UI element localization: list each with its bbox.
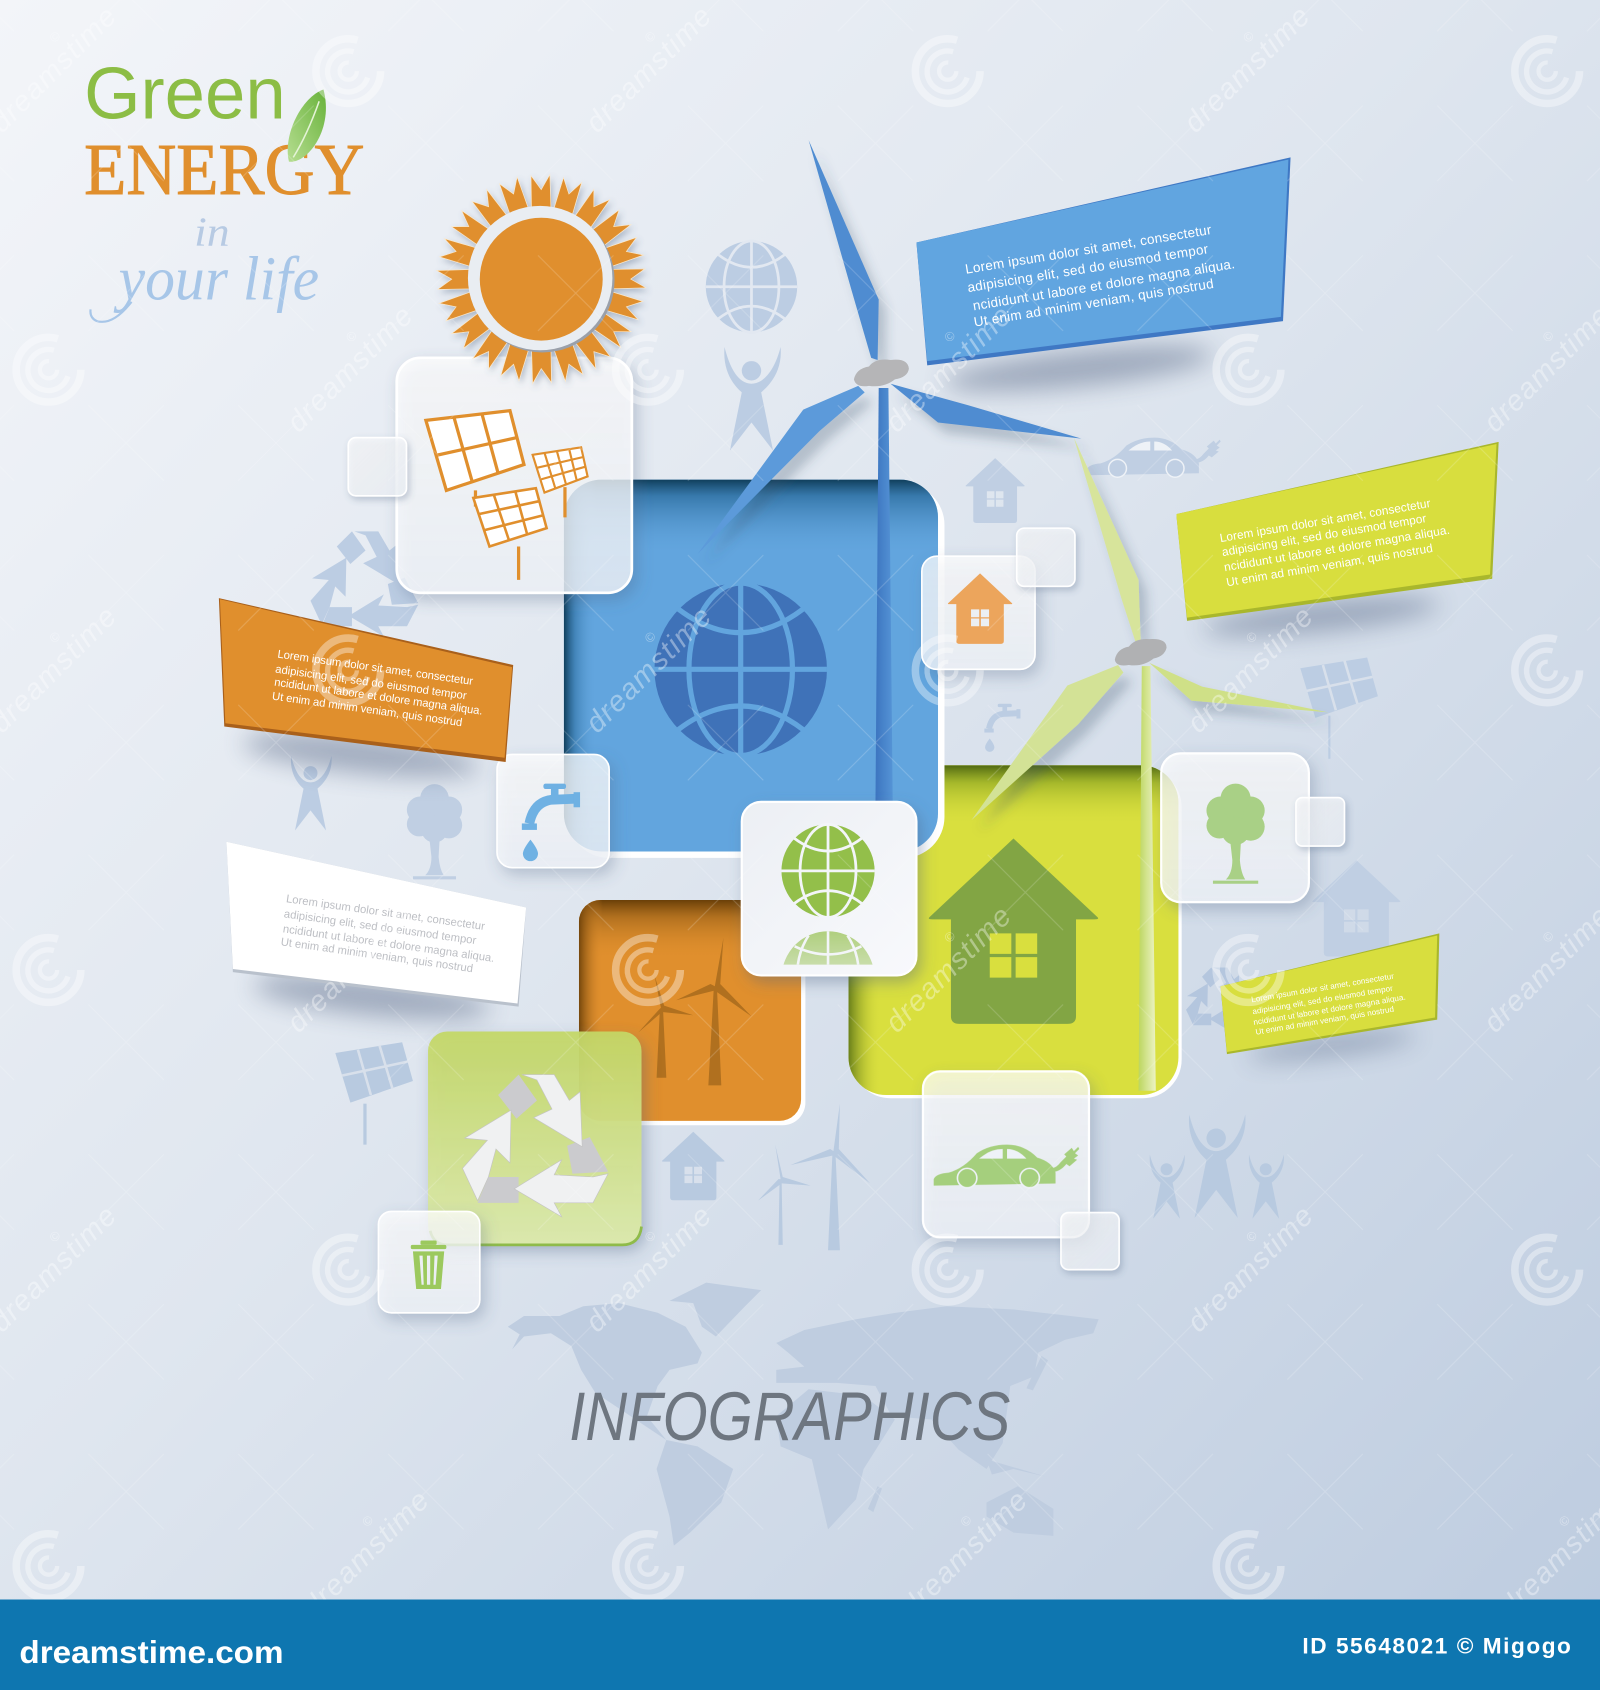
banner: blue bbox=[916, 157, 1291, 365]
background icon: car bbox=[1087, 438, 1221, 477]
background icon: solar panel lower bbox=[335, 1042, 413, 1145]
icon: turbines on orange bbox=[638, 938, 751, 1085]
banner: green large: adipisicing elit, sed do eiusmod tempor bbox=[1221, 511, 1427, 559]
background icon: person bbox=[724, 347, 781, 451]
card: recycle bbox=[428, 1031, 642, 1245]
card: car bbox=[923, 1071, 1089, 1237]
banner: green large bbox=[1176, 442, 1499, 621]
icon: electric car bbox=[934, 1145, 1079, 1188]
card: small square house bbox=[1017, 528, 1075, 586]
background icons: three people bbox=[1150, 1114, 1284, 1219]
banner: green small: ncididunt ut labore et dolore magna aliqua. bbox=[1253, 993, 1406, 1027]
title: Green bbox=[84, 53, 286, 135]
banner: green small: Ut enim ad minim veniam, quis nostrud bbox=[1255, 1005, 1395, 1037]
banner: blue: adipisicing elit, sed do eiusmod tempor bbox=[966, 241, 1210, 295]
background icon: tap bbox=[984, 704, 1020, 752]
wind turbine: blue bbox=[698, 140, 1081, 803]
banner: green small bbox=[1220, 933, 1439, 1054]
wind turbine: green bbox=[971, 438, 1328, 1091]
icon: big globe bbox=[654, 583, 827, 756]
card: small square solar bbox=[348, 438, 406, 496]
icon: recycle arrows bbox=[463, 1075, 608, 1217]
panel: orange cutout bbox=[579, 900, 805, 1125]
banner: orange: Ut enim ad minim veniam, quis nostrud bbox=[271, 691, 463, 729]
banner: green large: Lorem ipsum dolor sit amet, consectetur bbox=[1219, 496, 1432, 545]
heading: infographics: INFOGRAPHICS bbox=[569, 1378, 1010, 1455]
background icon: person left bbox=[291, 756, 332, 831]
icon: tree bbox=[1206, 784, 1265, 884]
banner: green small: Lorem ipsum dolor sit amet, consectetur bbox=[1251, 972, 1395, 1004]
background icon: house top bbox=[965, 458, 1025, 523]
icon: leaf bbox=[288, 89, 326, 162]
background icon: house right bbox=[1312, 860, 1400, 956]
card: trash bbox=[378, 1211, 480, 1313]
icon: trash can bbox=[411, 1241, 446, 1289]
card: house bbox=[922, 556, 1035, 669]
background icon: recycle bbox=[310, 531, 418, 637]
card: small square car bbox=[1061, 1213, 1119, 1270]
footer logo text: dreamstime.com bbox=[19, 1635, 284, 1670]
banner: green large: Ut enim ad minim veniam, quis nostrud bbox=[1225, 541, 1434, 589]
icon: orange house bbox=[948, 573, 1012, 644]
banner: green small: adipisicing elit, sed do eiusmod tempor bbox=[1252, 984, 1394, 1016]
icon: green globe bbox=[781, 824, 875, 917]
background icon: tree left bbox=[407, 784, 462, 879]
icon: solar panels bbox=[426, 411, 588, 580]
banner: blue: ncididunt ut labore et dolore magna aliqua. bbox=[972, 256, 1236, 313]
icon: tap bbox=[522, 784, 580, 861]
card: tree bbox=[1161, 753, 1309, 902]
title: in bbox=[194, 209, 230, 255]
background icon: house lower bbox=[662, 1132, 725, 1200]
footer id text: ID 55648021 © Migogo bbox=[1302, 1633, 1571, 1658]
banner: white: adipisicing elit, sed do eiusmod tempor bbox=[283, 908, 477, 947]
panel: green cutout bbox=[849, 765, 1182, 1098]
title: ENERGY bbox=[84, 129, 364, 210]
banner: blue: Ut enim ad minim veniam, quis nostrud bbox=[973, 276, 1215, 330]
banner: white bbox=[226, 842, 526, 1007]
world map bbox=[508, 1283, 1099, 1546]
background icons: small turbines bbox=[758, 1104, 870, 1250]
banner: orange: ncididunt ut labore et dolore magna aliqua. bbox=[273, 677, 483, 718]
banner: white: Ut enim ad minim veniam, quis nostrud bbox=[280, 936, 474, 975]
banner shadows bbox=[241, 336, 1440, 1065]
banner: orange: adipisicing elit, sed do eiusmod tempor bbox=[275, 664, 468, 702]
panel: blue cutout bbox=[564, 480, 944, 858]
title bbox=[84, 53, 364, 322]
card: solar panels bbox=[397, 358, 632, 593]
background icon: solar panel right bbox=[1300, 657, 1378, 759]
banner: white: Lorem ipsum dolor sit amet, consectetur bbox=[285, 893, 486, 933]
icon: sun bbox=[437, 175, 646, 384]
card: tap bbox=[497, 754, 609, 868]
banner: orange bbox=[219, 598, 513, 762]
banner: green large: ncididunt ut labore et dolore magna aliqua. bbox=[1223, 523, 1451, 574]
background icon: recycle partial bbox=[1186, 967, 1252, 1032]
icon: globe reflection bbox=[784, 931, 872, 965]
banner: orange: Lorem ipsum dolor sit amet, consectetur bbox=[277, 649, 474, 688]
background icon: globe bbox=[706, 241, 797, 332]
banner: white: ncididunt ut labore et dolore magna aliqua. bbox=[282, 923, 495, 965]
card: small square tree bbox=[1296, 798, 1344, 846]
title: your life bbox=[113, 244, 319, 314]
banner: blue: Lorem ipsum dolor sit amet, consectetur bbox=[964, 222, 1213, 277]
icon: big house bbox=[929, 839, 1098, 1024]
footer bar bbox=[0, 1599, 1600, 1690]
card: globe bbox=[742, 802, 916, 1024]
